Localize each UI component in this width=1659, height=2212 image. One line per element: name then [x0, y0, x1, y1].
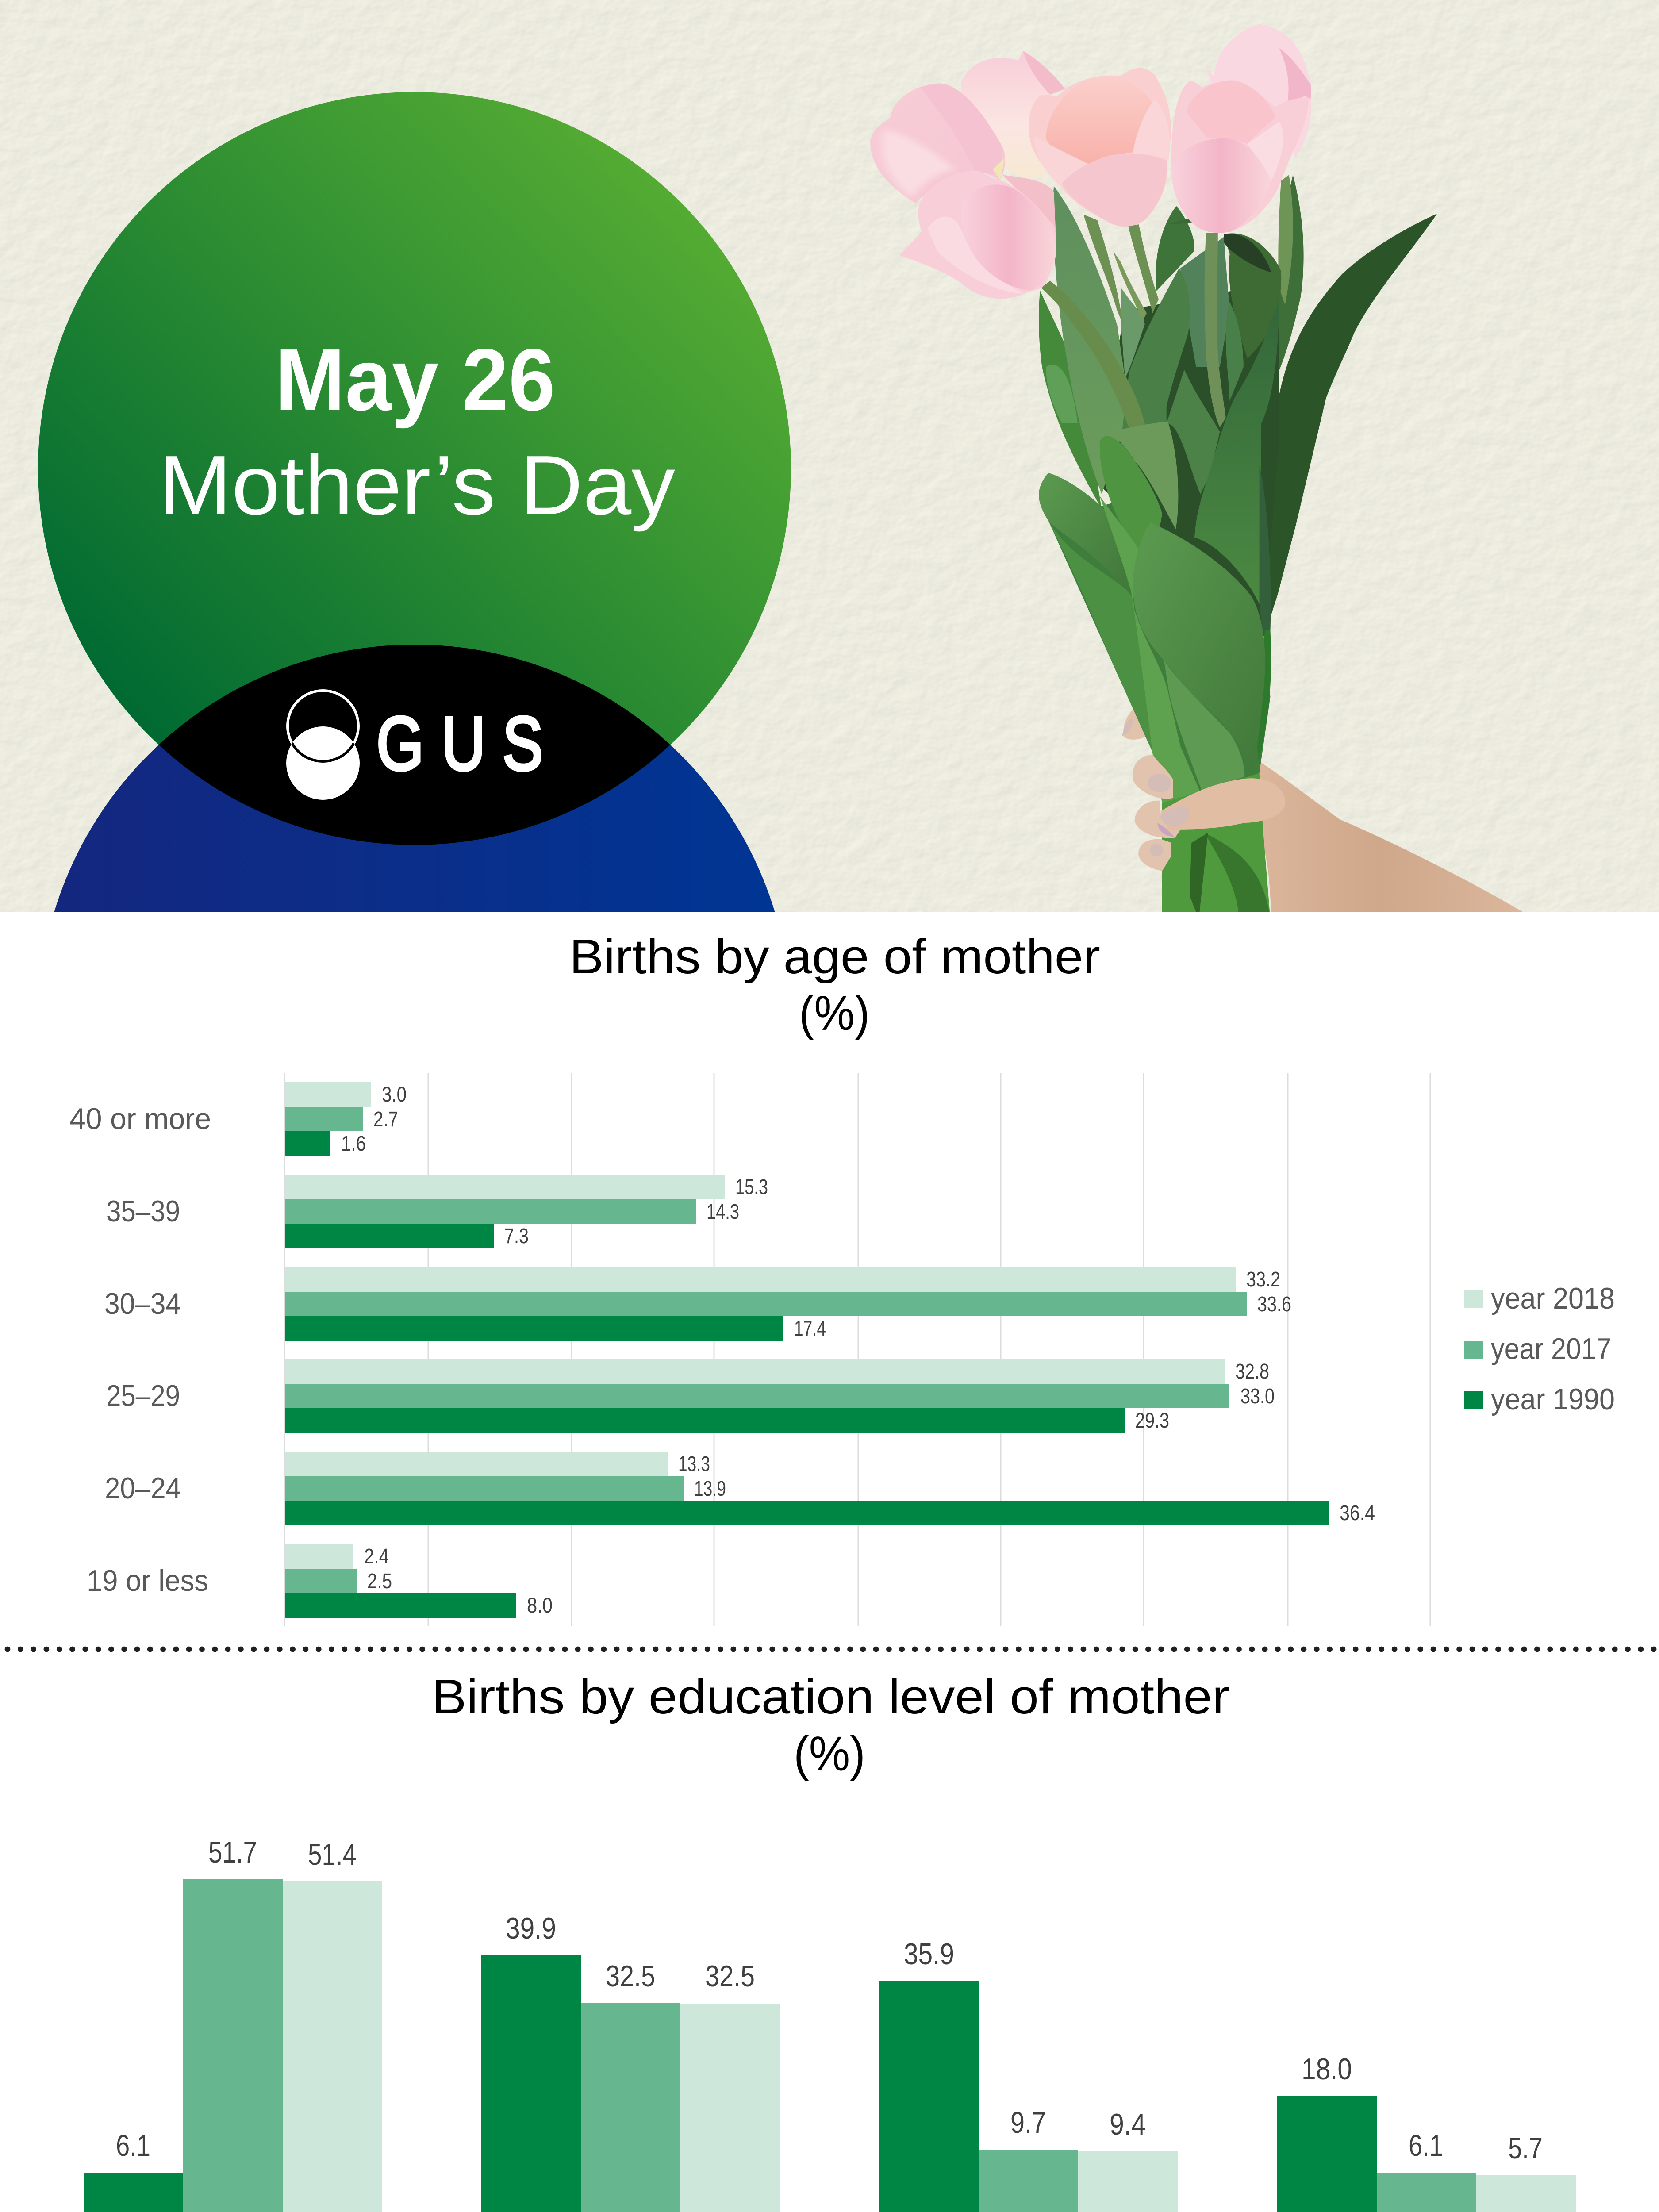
row: 19 or less: 2.4: [364, 1545, 389, 1568]
stem three: [1113, 251, 1147, 320]
green circle: [38, 92, 791, 845]
legend: age chart: year 2018: [1491, 1282, 1615, 1315]
row: 40 or more: 2.7: [373, 1108, 398, 1131]
photo: tulip blossoms and upper leaves: [870, 24, 1437, 630]
group: secondary: 32.5: [606, 1959, 655, 1993]
row: 40 or more: 3.0: [382, 1083, 407, 1106]
tulip: right: [1171, 80, 1309, 233]
row: 19 or less: 19 or less: [87, 1564, 208, 1598]
narrow lower sliver: [1256, 630, 1271, 761]
straight right stem: [1205, 233, 1226, 428]
tulip stems: [1083, 215, 1123, 325]
bright sheath: [1100, 496, 1201, 803]
group: higher: [84, 1836, 382, 2212]
curved left stem: [1041, 281, 1147, 433]
fold leaf front: [1100, 436, 1162, 553]
heading: Births by age of mother: [569, 929, 1100, 984]
leaf light patch: [1046, 365, 1078, 423]
row: 25-29: [106, 1359, 1275, 1433]
group: basic vocational: 35.9: [904, 1937, 954, 1971]
lower sheath leaf: [1164, 660, 1244, 793]
group: basic vocational: [879, 1937, 1178, 2212]
group: basic vocational: 9.7: [1010, 2106, 1046, 2139]
hero title: Mother’s Day: [159, 438, 675, 532]
group: secondary: [422, 1912, 826, 2212]
nails: [1122, 718, 1189, 856]
row: 35-39: 15.3: [735, 1175, 768, 1199]
group: lower secondary: [1267, 2052, 1581, 2212]
back centre leaf: [1156, 206, 1194, 291]
row: 25-29: 25–29: [106, 1379, 180, 1413]
row: 40 or more: 1.6: [341, 1132, 366, 1156]
row: 20-24: 13.3: [678, 1452, 710, 1476]
tulip: centre: [1029, 68, 1171, 227]
row: 25-29: 29.3: [1135, 1409, 1169, 1432]
row: 30-34: 33.6: [1257, 1293, 1291, 1316]
panel: births by education level: [34, 1670, 1625, 2212]
left folded leaf: [1039, 473, 1127, 591]
logo: GUS: [286, 691, 543, 800]
centre right leaf: [1194, 299, 1279, 604]
legend: age chart: [1464, 1282, 1615, 1416]
tulip: top right: [1206, 24, 1311, 158]
long left leaf: [1053, 186, 1125, 494]
bundle inner fold: [1190, 833, 1208, 919]
row: 20-24: 20–24: [105, 1471, 181, 1505]
logo ring: [288, 691, 358, 761]
dark curled leaf: [1224, 233, 1281, 358]
row: 19 or less: [87, 1544, 553, 1618]
grey green centre leaf: [1180, 237, 1230, 367]
long right leaf: [1260, 214, 1437, 617]
heading: [569, 929, 1100, 1041]
row: 19 or less: 2.5: [367, 1570, 392, 1593]
bundle backing: [1048, 498, 1270, 803]
row: 25-29: 32.8: [1235, 1360, 1269, 1383]
heading: (%): [799, 986, 870, 1041]
curled leaf shadow: [1224, 234, 1271, 273]
group: higher: 51.7: [208, 1836, 257, 1869]
blue circle: [38, 645, 791, 1398]
tulip: upper left: [961, 51, 1065, 179]
second finger: [1133, 755, 1173, 799]
horizontal bar chart: [69, 1073, 1430, 1626]
lower left leaf: [1039, 291, 1102, 509]
forearm and palm: [1252, 761, 1534, 919]
heading: Births by education level of mother: [432, 1670, 1229, 1724]
group: secondary: 39.9: [506, 1912, 556, 1945]
narrow leaf: [1121, 288, 1145, 378]
hero date: May 26: [275, 331, 555, 429]
left lower leaf: [1048, 521, 1153, 753]
photo: lower bouquet and hand: [1039, 421, 1534, 919]
dark filler behind bouquet: [1094, 282, 1279, 630]
legend: age chart: year 2017: [1491, 1332, 1611, 1366]
bundle dark wrap: [1204, 833, 1270, 919]
small leaf tip: [1167, 217, 1194, 224]
stem bundle: [1162, 773, 1270, 919]
row: 30-34: 17.4: [794, 1317, 826, 1340]
tulip: lower left: [900, 171, 1056, 299]
centre leaf: [1119, 268, 1190, 457]
row: 30-34: 33.2: [1246, 1268, 1280, 1291]
logo wordmark: GUS: [376, 701, 543, 787]
fourth finger: [1138, 839, 1171, 871]
back stem: [1278, 175, 1293, 305]
tulip: left: [870, 83, 1005, 203]
row: 40 or more: [69, 1082, 407, 1156]
group: higher: 51.4: [308, 1838, 357, 1871]
fold leaf underside: [1107, 421, 1178, 529]
panel: hero banner: [0, 0, 1659, 912]
third finger: [1135, 801, 1180, 838]
wall background: [0, 0, 1659, 912]
dark sliver: [1260, 465, 1271, 637]
logo disc: [286, 726, 360, 800]
row: 35-39: [106, 1175, 768, 1248]
row: 35-39: 35–39: [106, 1194, 180, 1228]
row: 20-24: [105, 1452, 1375, 1525]
row: 30-34: 30–34: [104, 1287, 181, 1321]
upper finger: [1123, 708, 1148, 740]
thumb: [1160, 778, 1285, 830]
group: higher: 6.1: [116, 2129, 150, 2162]
group: basic vocational: 9.4: [1110, 2108, 1146, 2141]
row: 25-29: 33.0: [1240, 1385, 1275, 1408]
row: 20-24: 36.4: [1340, 1502, 1375, 1525]
row: 35-39: 14.3: [707, 1200, 739, 1224]
legend: age chart: year 1990: [1491, 1382, 1615, 1416]
group: lower secondary: 5.7: [1508, 2131, 1543, 2165]
right centre leaf inner: [1226, 302, 1244, 401]
row: 40 or more: 40 or more: [69, 1102, 211, 1136]
heading: (%): [794, 1727, 865, 1781]
big central leaf: [1133, 522, 1265, 775]
lower middle leaf: [1167, 370, 1220, 494]
row: 30-34: [104, 1267, 1291, 1341]
group: lower secondary: 6.1: [1409, 2129, 1443, 2162]
group: secondary: 32.5: [705, 1959, 755, 1993]
row: 35-39: 7.3: [504, 1225, 529, 1248]
group: lower secondary: 18.0: [1302, 2052, 1352, 2086]
logo ring overlap: [288, 691, 358, 761]
row: 20-24: 13.9: [694, 1477, 726, 1501]
heading: [432, 1670, 1229, 1781]
stem two: [1128, 224, 1159, 313]
tall back leaf: [1267, 175, 1304, 395]
column chart: [34, 1836, 1625, 2212]
row: 19 or less: 8.0: [527, 1594, 553, 1617]
panel: births by age of mother: [69, 929, 1615, 1626]
black overlap lens: [38, 645, 791, 1398]
